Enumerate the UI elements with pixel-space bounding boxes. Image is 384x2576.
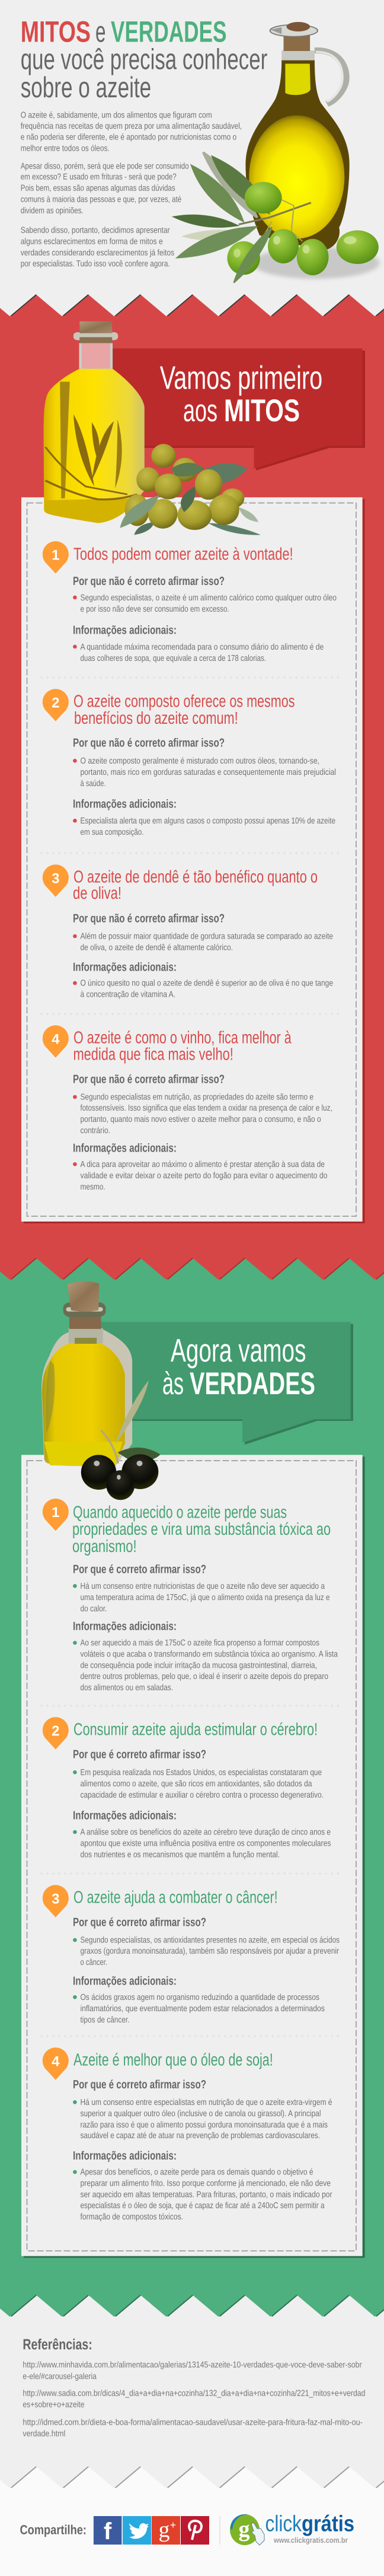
intro text: verdades considerando esclarecimentos já feitos [21,249,174,258]
additional info mito 1: A quantidade máxima recomendada para o consumo diário do alimento é de [81,643,324,652]
explanation verdade 1 [73,1582,329,1614]
intro text: por especialistas. Tudo isso você confere agora. [21,259,170,269]
explanation verdade 3: o câncer. [81,1958,107,1967]
icon: google plus: + [170,2519,176,2531]
explanation mito 3: Além de possuir maior quantidade de gordura saturada se comparado ao azeite [81,932,333,942]
explanation verdade 2: alimentos como o azeite, que são ricos em antioxidantes, são dotados da [81,1779,312,1789]
explanation mito 3 [73,932,333,953]
explanation verdade 4 [73,2098,332,2141]
references list [23,2361,365,2439]
heading mito 1: Todos podem comer azeite à vontade! [73,545,293,564]
title [21,15,267,104]
additional info verdade 3: tipos de câncer. [81,2015,129,2025]
explanation verdade 4: razão para isso é que o alimento possui gordura monoinsaturada que é a mais [81,2120,328,2130]
panel: verdades [21,1455,365,2258]
explanation mito 4: portanto, quanto mais novo estiver o azeite melhor para o consumo, e não o [81,1115,321,1124]
explanation verdade 2 [73,1768,324,1800]
additional info verdade 4: formação de compostos tóxicos. [81,2212,183,2222]
explanation verdade 2: Em pesquisa realizada nos Estados Unidos, os especialistas constataram que [81,1768,322,1777]
additional info mito 3 [73,979,333,1000]
mito 4 [43,1025,332,1192]
additional info verdade 3: inflamatórios, que eventualmente podem estar relacionados a determinados [81,2004,325,2014]
explanation mito 2 [73,756,336,788]
heading verdade 3: O azeite ajuda a combater o câncer! [73,1888,278,1907]
explanation mito 4: Segundo especialistas em nutrição, as propriedades do azeite são termo e [81,1093,313,1102]
icon: facebook: f [104,2518,112,2545]
additional info verdade 4: Apesar dos benefícios, o azeite perde para os demais quando o objetivo é [81,2168,313,2177]
additional info heading mito 3: Informações adicionais: [73,961,177,974]
title: MITOS [21,15,91,49]
references list: es+sobre+o+azeite [23,2400,85,2410]
additional info heading verdade 3: Informações adicionais: [73,1975,177,1988]
explanation mito 4: contrário. [81,1126,110,1136]
references list: e-ele/#carousel-galeria [23,2372,97,2381]
title: VERDADES [111,15,226,49]
panel: mitos [21,497,365,1223]
additional info mito 4: validade e evitar deixar o azeite perto do fogão para evitar o aquecimento do [81,1171,327,1181]
heading mito 3: de oliva! [73,884,121,903]
callout: vamos primeiro aos mitos [89,348,365,470]
verdade 1 [43,1499,338,1693]
additional info verdade 3: Os ácidos graxos agem no organismo reduzindo a quantidade de processos [81,1993,319,2002]
explanation verdade 1: uma temperatura acima de 175oC, já que o alimento oxida na presença da luz e [81,1593,329,1602]
explanation mito 4: fotossensíveis. Isso significa que elas tendem a oxidar na presença de calor e luz, [81,1103,332,1113]
explanation mito 2: portanto, mais rico em gorduras saturadas e consequentemente mais prejudicial [81,768,336,777]
logo: clickgratis [230,2512,354,2545]
mito 1 [43,541,337,663]
heading mito 2: O azeite composto oferece os mesmos [73,692,295,711]
illustration: olive oil jug with olive branch [174,22,379,283]
additional info heading verdade 1: Informações adicionais: [73,1620,177,1633]
additional info verdade 2: apontou que existe uma influência positiva entre os componentes moleculares [81,1839,331,1849]
intro text: O azeite é, sabidamente, um dos alimentos que figuram com [21,111,212,120]
additional info verdade 3 [73,1993,325,2025]
pin number 4 [43,2047,69,2080]
intro text: frequência nas receitas de quem preza por uma alimentação saudável, [21,122,242,131]
intro text: Apesar disso, porém, será que ele pode ser consumido [21,161,189,171]
verdade 2 [43,1717,331,1860]
icon: pinterest [181,2516,209,2545]
heading mito 2: benefícios do azeite comum! [74,709,238,728]
pin number 4 [43,1025,69,1058]
pin number 3 [43,864,69,897]
callout: agora vamos as verdades: às [162,1366,184,1401]
question mito 4: Por que não é correto afirmar isso? [73,1073,225,1086]
question mito 1: Por que não é correto afirmar isso? [73,575,225,588]
additional info verdade 1: de consequência pode incluir irritação da mucosa gastrointestinal, diarreia, [81,1661,317,1671]
references zigzag edge [0,2290,384,2488]
pin number 1: 1 [52,1505,59,1521]
question mito 2: Por que não é correto afirmar isso? [73,737,225,750]
additional info verdade 1: dentre outros problemas, pelo que, o ideal é inserir o azeite depois do preparo [81,1672,328,1681]
explanation mito 1: Segundo especialistas, o azeite é um alimento calórico como qualquer outro óleo [81,593,337,603]
title: que você precisa conhecer [21,44,267,76]
callout: agora vamos as verdades [83,1322,353,1445]
pin number 3: 3 [52,870,59,886]
intro text: dividem as opiniões. [21,206,84,216]
references list: verdade.html [23,2429,65,2439]
intro text: em excesso? E usado em frituras - será que pode? [21,173,177,182]
pin number 2 [43,1717,69,1750]
additional info mito 1 [73,643,324,663]
heading mito 4 [73,1028,292,1064]
explanation mito 1 [73,593,337,614]
logo: clickgratis: g [238,2517,250,2542]
illustration: oil bottle with black olives [41,1281,161,1500]
logo: clickgratis: grátis [302,2512,354,2537]
callout: vamos primeiro aos mitos: aos [183,393,217,428]
additional info verdade 4: especialistas é o óleo de soja, que é capaz de ficar até a 240oC sem permitir a [81,2201,325,2211]
pin number 3 [43,1885,69,1917]
pin number 3: 3 [52,1891,59,1907]
intro text: Pois bem, essas são apenas algumas das dúvidas [21,184,175,193]
intro zigzag edge [0,0,384,316]
explanation verdade 1: Há um consenso entre nutricionistas de que o azeite não deve ser aquecido a [81,1582,325,1591]
callout: agora vamos as verdades: VERDADES [190,1366,315,1401]
mito 3 [43,864,333,1000]
heading verdade 1 [72,1503,331,1556]
additional info verdade 4: ser aquecido em altas temperatuas. Para frituras, portanto, o mais indicado por [81,2190,332,2200]
heading mito 4: O azeite é como o vinho, fica melhor à [73,1028,292,1047]
additional info verdade 4: preparar um alimento frito. Isso porque conforme já mencionado, ele não deve [81,2179,331,2189]
icon: google plus [152,2516,180,2545]
icon: google plus: g [159,2517,169,2542]
additional info verdade 1: voláteis o que acaba o transformando em substância tóxica ao organismo. A lista [81,1650,338,1659]
additional info heading verdade 4: Informações adicionais: [73,2149,177,2162]
additional info mito 4 [73,1160,327,1192]
additional info heading mito 2: Informações adicionais: [73,798,177,811]
heading verdade 1: Quando aquecido o azeite perde suas [73,1503,287,1522]
callout: vamos primeiro aos mitos: MITOS [224,393,300,428]
intro text: melhor entre todos os óleos. [21,144,110,153]
references heading: Referências: [23,2336,92,2353]
explanation mito 3: de oliva, o azeite de dendê é altamente calórico. [81,943,233,953]
pin number 2 [43,689,69,721]
intro text [21,111,242,269]
heading mito 4: medida que fica mais velho! [73,1045,233,1064]
pin number 1 [43,541,69,574]
explanation mito 2: à saúde. [81,779,105,788]
green section background [0,1252,384,2317]
intro text: alguns esclarecimentos em forma de mitos e [21,237,163,247]
additional info verdade 1: Ao ser aquecido a mais de 175oC o azeite fica propenso a formar compostos [81,1639,319,1648]
additional info verdade 4 [73,2168,332,2222]
title: sobre o azeite [21,72,151,104]
callout: agora vamos as verdades: Agora vamos [171,1332,306,1369]
intro text: Sabendo disso, portanto, decidimos apresentar [21,226,170,236]
additional info heading mito 1: Informações adicionais: [73,624,177,637]
additional info mito 3: à concentração de vitamina A. [81,990,175,1000]
question mito 3: Por que não é correto afirmar isso? [73,912,225,926]
pin number 2: 2 [52,1723,59,1739]
explanation mito 1: e por isso não deve ser consumido em excesso. [81,605,229,614]
explanation verdade 3 [73,1936,340,1967]
heading mito 2 [73,692,295,728]
explanation mito 4 [73,1093,332,1136]
additional info mito 1: duas colheres de sopa, que equivale a cerca de 178 calorias. [81,654,266,663]
icon: twitter [123,2516,151,2545]
mito 2 [43,689,336,837]
additional info verdade 1 [73,1639,338,1693]
additional info verdade 2: A análise sobre os benefícios do azeite ao cérebro teve duração de cinco anos e [81,1828,331,1837]
explanation verdade 2: capacidade de estimular e auxiliar o cérebro contra o processo degenerativo. [81,1791,324,1800]
logo: clickgratis: click [265,2512,302,2537]
question verdade 1: Por que é correto afirmar isso? [73,1563,206,1576]
additional info mito 4: A dica para aproveitar ao máximo o alimento é prestar atenção à sua data de [81,1160,325,1169]
heading verdade 4: Azeite é melhor que o óleo de soja! [73,2050,273,2069]
explanation mito 2: O azeite composto geralmente é misturado com outros óleos, tornando-se, [81,756,319,766]
pin number 4: 4 [52,2053,60,2069]
question verdade 2: Por que é correto afirmar isso? [73,1748,206,1761]
logo: clickgratis: www.clickgratis.com.br [273,2536,348,2545]
explanation verdade 4: Há um consenso entre especialistas em nutrição de que o azeite extra-virgem é [81,2098,332,2107]
additional info verdade 2: dos nutrientes e os mecanismos que mantêm a função mental. [81,1850,280,1860]
additional info mito 2 [73,816,335,837]
pin number 2: 2 [52,695,59,711]
verdade 3 [43,1885,340,2025]
explanation verdade 1: do calor. [81,1604,107,1614]
illustration: oil bottle with green olives [44,322,261,535]
pin number 4: 4 [52,1031,60,1047]
question verdade 3: Por que é correto afirmar isso? [73,1916,206,1929]
explanation verdade 4: saudável e capaz até de atuar na prevenção de problemas cardiovasculares. [81,2131,320,2141]
heading mito 3 [73,867,318,903]
pin number 1 [43,1499,69,1531]
additional info mito 4: mesmo. [81,1182,105,1192]
share label: Compartilhe: [20,2523,87,2537]
callout: vamos primeiro aos mitos: Vamos primeiro [160,359,322,396]
additional info mito 2: em sua composição. [81,828,143,837]
additional info verdade 1: dos alimentos ou em saladas. [81,1683,173,1693]
additional info heading mito 4: Informações adicionais: [73,1142,177,1155]
additional info mito 3: O único quesito no qual o azeite de dendê é superior ao de oliva é no que tange [81,979,333,988]
heading verdade 1: organismo! [72,1537,137,1556]
icon: facebook [94,2516,121,2545]
title: e [95,15,105,49]
intro text: comuns à maioria das pessoas e que, por vezes, até [21,195,181,205]
additional info verdade 2 [73,1828,331,1860]
additional info heading verdade 2: Informações adicionais: [73,1809,177,1823]
verdade 4 [43,2047,332,2222]
red section background [0,285,384,1280]
pin number 1: 1 [52,547,59,563]
footer background [0,2456,384,2576]
explanation verdade 4: superior a qualquer outro óleo (inclusive o de canola ou girassol). A principal [81,2109,321,2119]
question verdade 4: Por que é correto afirmar isso? [73,2078,206,2091]
intro text: e não poderia ser diferente, ele é apontado por nutricionistas como o [21,133,236,142]
